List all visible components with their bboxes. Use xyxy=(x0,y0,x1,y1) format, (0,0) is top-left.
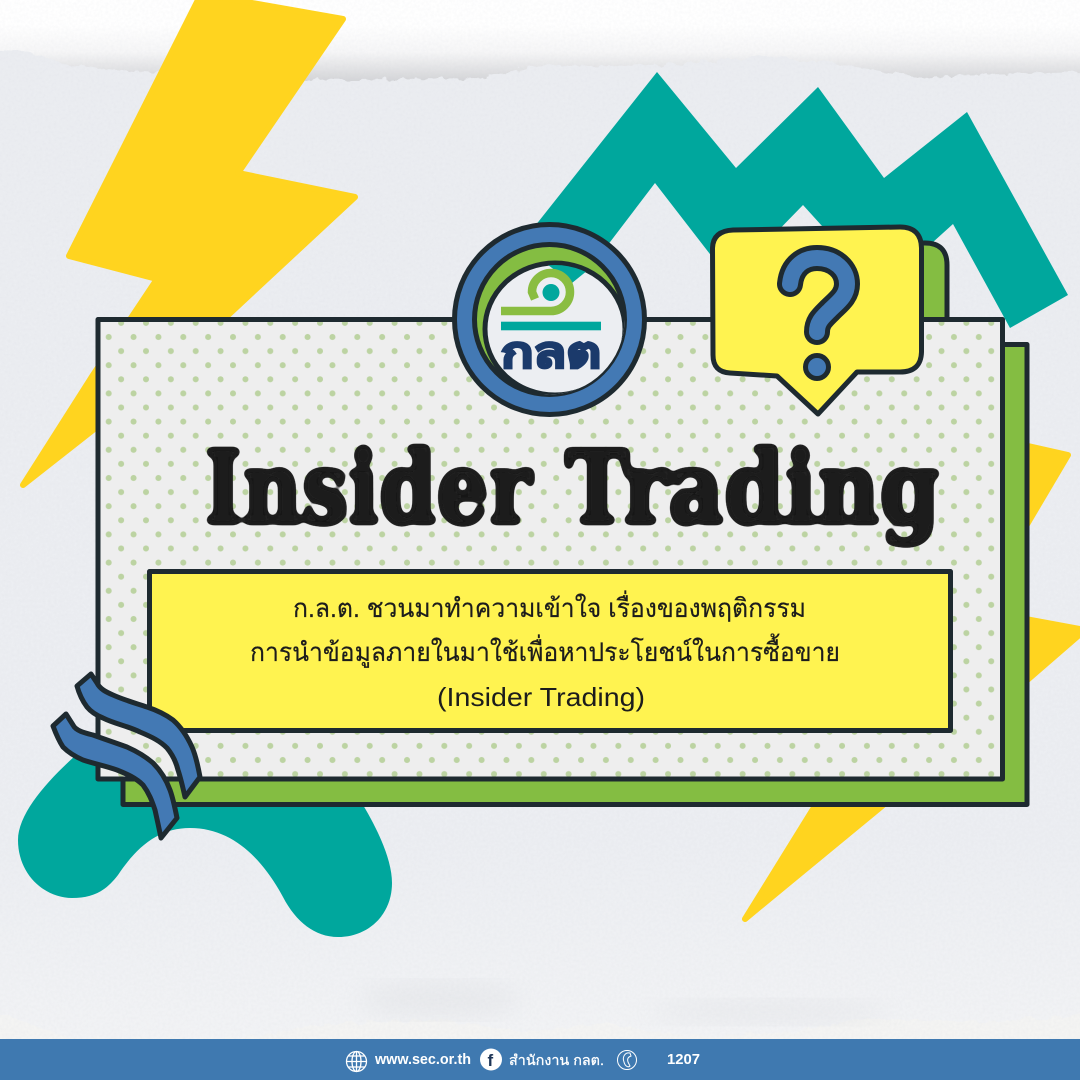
description line 1: ก.ล.ต. ชวนมาทำความเข้าใจ เรื่องของพฤติกรรม xyxy=(293,590,806,623)
lightning bolt: right xyxy=(745,442,1080,919)
website: www.sec.or.th xyxy=(374,1052,471,1068)
title xyxy=(204,428,940,547)
description line 2: การนำข้อมูลภายในมาใช้เพื่อหาประโยชน์ในการซื้อขาย xyxy=(250,633,840,668)
inner crescent xyxy=(474,244,624,394)
icon: phone xyxy=(618,1050,636,1070)
title: Insider xyxy=(204,428,533,547)
icon: facebook: f xyxy=(488,1051,494,1070)
description line 3: (Insider Trading) xyxy=(437,682,645,712)
icon: facebook xyxy=(480,1048,502,1070)
lightning bolt: top left xyxy=(23,0,355,485)
green back panel xyxy=(123,243,1027,804)
hotline: 1207 xyxy=(667,1052,700,1068)
footer bar xyxy=(0,1039,1080,1080)
title: Trading xyxy=(565,428,940,547)
dotted front panel xyxy=(98,320,1002,779)
ribbon swooshes xyxy=(53,674,200,838)
yellow description box xyxy=(150,572,950,730)
logo badge xyxy=(454,224,644,414)
logo: teal bar xyxy=(501,322,601,330)
teal blob xyxy=(18,720,392,937)
logo: wordmark: กลต xyxy=(501,329,601,376)
ring xyxy=(454,224,644,414)
logo: swirl xyxy=(501,273,570,311)
question speech bubble xyxy=(712,227,922,414)
icon: question mark xyxy=(790,258,847,378)
teal zigzag xyxy=(535,72,1068,328)
logo: teal dot xyxy=(542,284,560,301)
lens xyxy=(482,260,624,394)
ribbon 2 xyxy=(53,714,177,838)
facebook name: สำนักงาน กลต. xyxy=(509,1052,604,1068)
ribbon 1 xyxy=(77,674,200,797)
icon: globe xyxy=(346,1052,366,1072)
